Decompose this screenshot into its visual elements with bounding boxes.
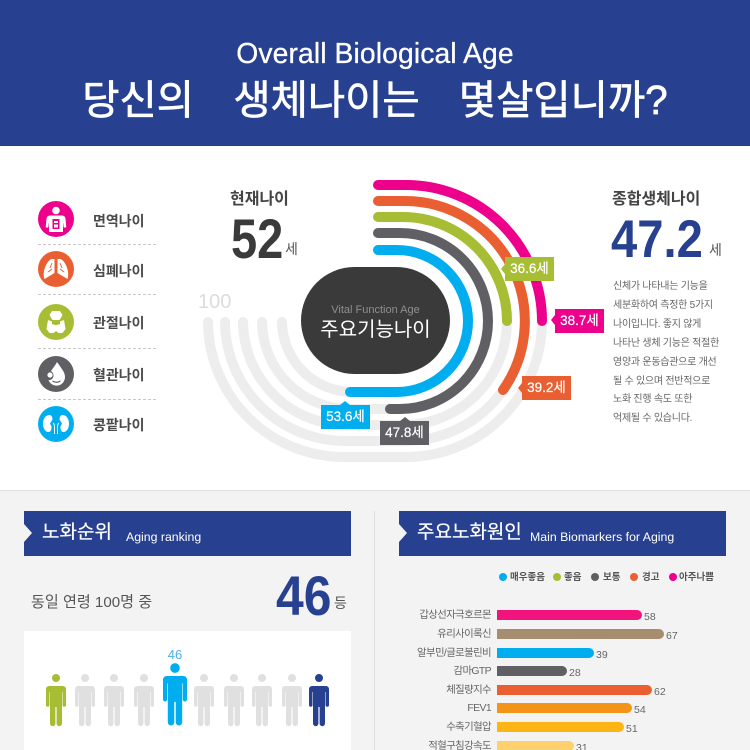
arc: immune [378,185,542,321]
row 3: 39 [596,649,608,661]
current age heading: 현재나이 [230,191,289,208]
description text: 나이입니다. 좋지 않게 [613,319,701,330]
arc: kidney [350,250,468,392]
description text: 신체가 나타내는 기능을 [613,281,708,292]
icon: lungs [38,251,74,287]
tag: 39.2: 39.2세 [527,380,566,395]
row 7: 수축기혈압 [446,722,491,733]
row 7: 51 [626,723,638,735]
arc: cardiopulmonary [378,201,525,390]
tag: 53.6: 53.6세 [326,409,365,424]
row 6 [467,703,646,716]
overall age heading: 종합생체나이 [612,191,700,208]
row 1: 갑상선자극호르몬 [419,610,491,621]
legend [499,572,714,583]
description text: 될 수 있으며 전반적으로 [613,376,710,387]
heading korean: 노화순위 [42,522,112,543]
label: cardiopulmonary age: 심폐나이 [93,263,145,279]
rank unit: 등 [334,595,347,611]
bar chart [417,609,678,750]
lower section background [0,490,750,750]
tag: 47.8: 47.8세 [385,425,424,440]
people chart [24,631,351,750]
icon: immune body [38,201,74,237]
row 2 [437,628,678,642]
row 1 [419,609,656,623]
tag: 47.8 [380,421,429,445]
tag pointers [340,264,555,421]
icon: joint [38,304,74,340]
unit: 세 [285,241,298,257]
row 3: 알부민/글로불린비 [417,648,491,659]
legend: very bad: 아주나쁨 [679,572,714,583]
legend: good: 좋음 [564,572,581,583]
heading korean: 주요노화원인 [417,522,522,543]
row 4 [454,665,581,679]
value 46: 46 [168,647,182,662]
row 4: 28 [569,667,581,679]
legend: normal: 보통 [603,572,620,583]
row 7 [446,721,638,735]
row 5: 62 [654,686,666,698]
description text: 노화 진행 속도 또한 [613,394,692,405]
description text: 나타난 생체 기능은 적절한 [613,338,719,349]
center pill [301,267,450,374]
row 6: FEV1 [467,703,491,714]
pill english: Vital Function Age [331,304,420,316]
arc: joint [378,217,507,321]
rank number: 46 [276,564,331,627]
tag: 39.2 [522,376,571,400]
tag: 36.6 [505,257,554,281]
row 6: 54 [634,704,646,716]
header banner [0,0,750,146]
legend: very good: 매우좋음 [510,572,545,583]
people icons [46,663,329,726]
scale label 100: 100 [198,291,231,313]
label: kidney age: 콩팥나이 [93,417,145,433]
current age value [231,207,298,270]
legend list of age types [38,201,156,442]
panel: aging ranking [24,511,351,750]
row 8 [428,740,588,750]
row 5 [446,684,666,698]
tag: 38.7 [555,309,604,333]
number 47.2: 47.2 [611,210,703,269]
unit: 세 [709,242,722,258]
heading english: Main Biomarkers for Aging [530,530,674,544]
panel: main biomarkers [399,511,726,556]
icon: blood drop [38,356,74,392]
heading bar [399,511,726,556]
tag: 36.6: 36.6세 [510,261,549,276]
overall age value [611,210,722,269]
arc: vascular [378,233,488,409]
tag: 38.7: 38.7세 [560,313,599,328]
label: joint age: 관절나이 [93,315,145,331]
heading bar [24,511,351,556]
description text [613,280,719,424]
description text: 세분화하여 측정한 5가지 [613,300,713,311]
row 5: 체질량지수 [446,685,491,696]
label: immune age: 면역나이 [93,213,145,229]
row 4: 감마GTP [454,666,491,677]
title english: Overall Biological Age [236,37,514,69]
heading english: Aging ranking [126,530,201,544]
label: vascular age: 혈관나이 [93,367,145,383]
pill korean: 주요기능나이 [320,319,431,341]
row 2: 67 [666,630,678,642]
tag: 53.6 [321,405,370,429]
row 3 [417,647,608,661]
ranking caption: 동일 연령 100명 중 [31,594,152,611]
description text: 억제될 수 있습니다. [613,413,692,424]
row 1: 58 [644,611,656,623]
legend: warning: 경고 [642,572,659,583]
title korean: 당신의 생체나이는 몇살입니까? [82,77,668,123]
number 52: 52 [231,207,283,270]
description text: 영양과 운동습관으로 개선 [613,357,717,368]
row 2: 유리사이록신 [437,629,491,640]
icon: kidneys [38,406,74,442]
